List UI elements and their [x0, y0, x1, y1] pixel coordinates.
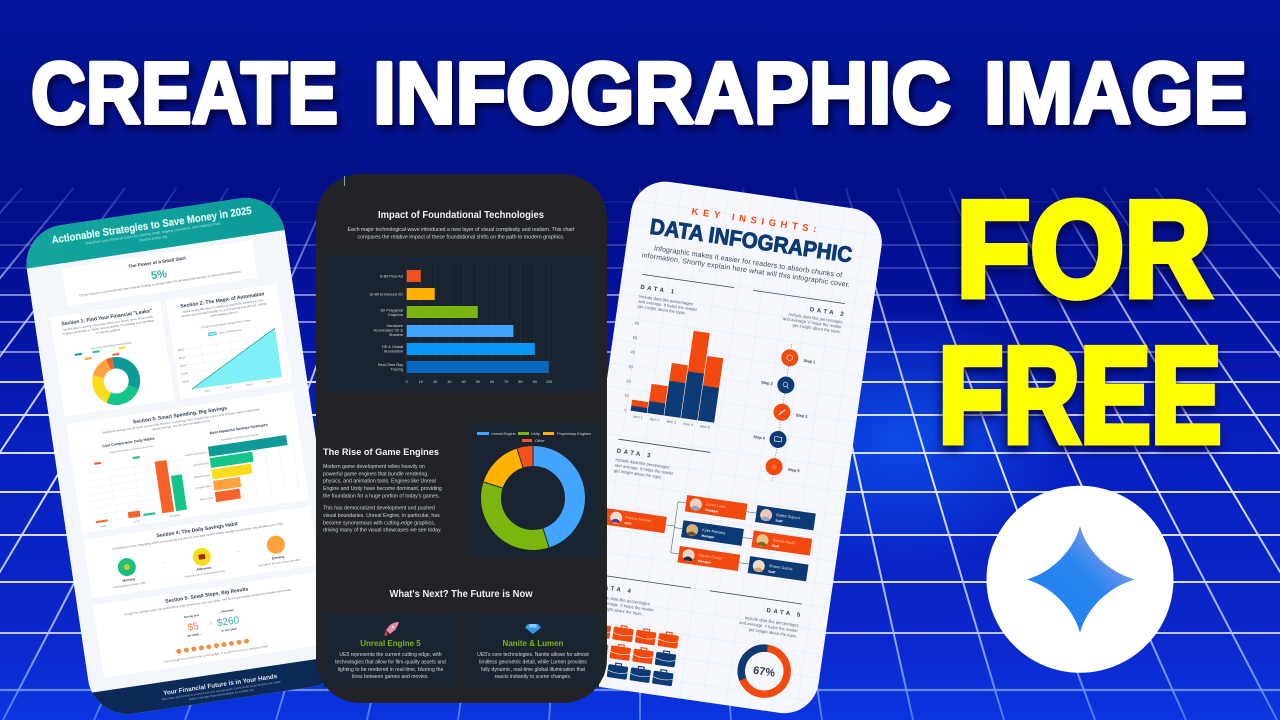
horizontal bar chart: Shaders — [389, 333, 403, 337]
data 2: steps: Step 3 — [796, 412, 809, 419]
rules — [589, 273, 845, 604]
headline: for free — [938, 173, 1222, 471]
data 3: org chart: Bailey Dupont — [776, 513, 801, 520]
card: nanite and lumen: reacts instantly to scene changes. — [495, 674, 571, 680]
panel: section 5 small steps — [93, 572, 330, 678]
data 3: org chart: Kylie Petrakis — [702, 528, 725, 535]
data 1: stacked bar chart: get insight about the topic. — [637, 304, 686, 315]
headline: for free: FOR — [956, 173, 1212, 325]
card: unreal engine 5: technologies that allow for film-quality assets and — [335, 660, 446, 666]
panel: power of a small start: The Power of a Small Start — [128, 255, 187, 269]
panel: section 2 area chart: $5000 — [179, 356, 186, 360]
panel: section 2 area chart: Make saving effortless by setting up automatic transfers to your — [183, 298, 264, 314]
horizontal bar chart — [324, 255, 598, 392]
data 1: stacked bar chart: Item 2 — [649, 417, 660, 422]
data 5: 67% donut: DATA 5 — [766, 608, 801, 619]
data 3: org chart: Samira Hadid — [772, 538, 796, 545]
panel: section 4 daily habit: → — [162, 559, 167, 566]
panel: savings infographic card — [26, 198, 324, 714]
text block: rise of game engines: The Rise of Game Engines — [323, 447, 439, 458]
panel: section 3 bar charts: Make Coffee — [200, 496, 214, 501]
panel: section 4 daily habit: Cook dinner at home, review spending — [258, 558, 301, 568]
panel: section 3 bar charts: Compare Plans — [195, 484, 213, 490]
card heading: KEY INSIGHTS: — [691, 206, 817, 235]
data 1: stacked bar chart: DATA 1 — [640, 285, 675, 296]
data 3: org chart: CEO — [624, 521, 632, 526]
data 4: briefcase pictogram — [603, 585, 679, 686]
panel: section 1 donut: The first step to saving is knowing where your money goes. Many small, — [62, 314, 154, 332]
card: unreal engine 5: UE5 represents the current cutting edge, with — [339, 652, 442, 658]
text block: rise of game engines — [323, 447, 442, 534]
text block: rise of game engines: powerful game engines that bundle rendering, — [323, 471, 429, 477]
panel: section 3 bar charts: annual savings, and the best strategies to use. — [152, 419, 211, 431]
panel: section 4 daily habit: Afternoon — [196, 566, 212, 572]
card header — [21, 192, 285, 269]
data 3: org chart: and average. It helps the reader — [614, 462, 674, 476]
text block: rise of game engines: driving many of the visual showcases we see today. — [323, 528, 442, 534]
horizontal bar chart: Hardware — [387, 324, 403, 328]
title: Create Infographic Image: IMAGE — [984, 45, 1247, 142]
panel: section 2 area chart: $3000 — [181, 372, 189, 376]
card: nanite and lumen — [466, 613, 599, 687]
panel: section 4 daily habit: Pack breakfast & make coffee — [113, 581, 147, 589]
horizontal bar chart: 80 — [518, 380, 523, 384]
donut chart: game engines: Proprietary Engines — [557, 431, 591, 436]
donut chart: game engines: Other — [535, 438, 545, 443]
panel: section 5 small steps: per week... — [187, 632, 202, 638]
data 1: stacked bar chart: Item 4 — [683, 422, 693, 427]
card footer — [92, 659, 324, 714]
data 3: org chart: Staff — [775, 518, 784, 524]
panel: section 3 bar charts: Cancel Subscriptions — [184, 451, 208, 457]
card header: choices every day. — [139, 234, 168, 243]
donut chart: game engines — [467, 423, 599, 557]
panel: section 1 donut: frequent purchases or "leaks" add up quickly. Try tracking your spending — [62, 318, 154, 336]
data 2: steps: Step 5 — [788, 467, 801, 473]
panel: section 3 bar charts — [66, 391, 309, 533]
panel: section 4 daily habit: Pack your lunch, avoid impulse buys — [185, 570, 226, 579]
data 1: stacked bar chart: 60 — [634, 320, 640, 326]
panel: section 3 bar charts: Projected Savings on Common Expenses — [109, 445, 154, 454]
card heading: Infographic makes it easier for readers to absorb chunks of — [653, 245, 843, 279]
panel: section 4 daily habit: → — [236, 548, 242, 555]
card heading: DATA INFOGRAPHIC — [648, 214, 854, 268]
heading: foundational technologies — [348, 209, 575, 240]
card footer: Your Financial Future is in Your Hands — [163, 673, 278, 697]
card footer: builds a stronger financial foundation for a better you. — [189, 688, 255, 701]
panel: section 3 bar charts: Meal Planning — [193, 462, 209, 467]
data 1: stacked bar chart: 50 — [632, 335, 638, 340]
card: unreal engine 5: Unreal Engine 5 — [360, 639, 421, 648]
data 4: briefcase pictogram: and average. It helps the reader — [595, 599, 655, 613]
data 5: 67% donut — [738, 608, 800, 698]
panel: section 2 area chart: $2000 — [182, 380, 190, 384]
data 3: org chart: Harper Russo — [698, 553, 722, 561]
panel: power of a small start: 5% — [150, 268, 168, 282]
card: unreal engine 5 — [324, 613, 457, 687]
card heading: information. Shortly explain here what will this infographic cover. — [641, 252, 850, 289]
data 2: steps: DATA 2 — [809, 307, 845, 318]
data 1: stacked bar chart: 40 — [630, 349, 636, 355]
data 2: steps: Step 4 — [753, 434, 766, 441]
data 2: steps: get insight about the topic. — [792, 322, 841, 334]
heading: foundational technologies: Each major technological wave introduced a new layer of visual complexity and realism. This chart — [348, 227, 575, 233]
horizontal bar chart: 16-Bit Enhanced 2D — [369, 292, 403, 296]
panel: section 1 donut: Section 1: Find Your Financial "Leaks" — [61, 308, 153, 328]
data 3: org chart: Manager — [698, 559, 712, 565]
panel: section 3 bar charts: Most Impactful Savings Strategies — [209, 423, 268, 435]
data 3: org chart: Aaron Loeb — [706, 502, 726, 509]
heading: foundational technologies: Impact of Foundational Technologies — [378, 209, 544, 221]
panel: section 2 area chart: Section 2: The Magic of Automation — [180, 291, 265, 310]
data 1: stacked bar chart: 30 — [628, 364, 634, 370]
data 4: briefcase pictogram: Include data like percentages — [595, 594, 650, 606]
panel: section 5 small steps: That's enough for a weekend trip, a new gadget, or a solid boost to your emergency fund! — [163, 644, 269, 664]
card heading — [642, 208, 852, 287]
horizontal bar chart: Graphics — [388, 313, 403, 317]
text block: rise of game engines: physics, and animation tools. Engines like Unreal — [323, 479, 436, 485]
data 1: stacked bar chart: Item 5 — [700, 424, 710, 430]
data 3: org chart: DATA 3 — [616, 449, 651, 459]
panel: section 5 small steps: ...becomes — [219, 608, 234, 614]
panel: section 5 small steps: Section 5: Small Steps, Big Results — [165, 586, 249, 605]
icon: gem — [525, 624, 541, 634]
card: unreal engine 5: lighting to be rendered in real-time, blurring the — [338, 667, 443, 673]
data 3: org chart: Manager — [705, 508, 719, 514]
horizontal bar chart: 8-Bit Pixel Art — [380, 274, 404, 278]
data 1: stacked bar chart: Item 1 — [633, 415, 643, 420]
horizontal bar chart: 30 — [447, 380, 452, 384]
horizontal bar chart: 70 — [504, 380, 508, 384]
panel: section 5 small steps: It might not feel like much, but small efforts build momentum over your goals. See how a tiny weekly saving accumulates each week. — [124, 587, 292, 616]
horizontal bar chart: Illumination — [384, 350, 403, 354]
panel: section 1 donut — [50, 301, 175, 417]
panel: section 5 small steps: Saving just — [184, 613, 199, 619]
panel: section 2 area chart: Year 3 — [246, 383, 254, 387]
donut chart: game engines: Unreal Engine — [491, 431, 516, 436]
horizontal bar chart: HD & Global — [382, 345, 403, 349]
horizontal bar chart: 3D Polygonal — [380, 308, 403, 312]
horizontal bar chart: 60 — [490, 380, 494, 384]
icon: gemini star badge — [986, 486, 1174, 673]
card: nanite and lumen: fully dynamic, real-time global illumination that — [481, 667, 586, 673]
panel: data infographic card — [599, 182, 882, 714]
title: Create Infographic Image: INFOGRAPHIC — [373, 45, 951, 142]
panel: power of a small start: Of your income is a powerful first step towards building a savings habit. It's not about the amount, it's about the consistency. — [79, 269, 242, 298]
data 1: stacked bar chart: Include data like percentages — [639, 294, 693, 306]
panel: section 1 donut: Top Areas of Monthly Overspending — [90, 340, 132, 350]
panel: section 3 bar charts: Cost Comparison: Daily Habits — [102, 437, 155, 448]
horizontal bar chart: 90 — [533, 380, 537, 384]
data 3: org chart: get insight about the topic. — [614, 468, 663, 480]
data 1: stacked bar chart — [624, 284, 724, 428]
horizontal bar chart: 100 — [546, 380, 552, 384]
data 3: org chart: Staff — [768, 569, 776, 574]
panel: section 2 area chart: $4000 — [180, 364, 188, 368]
horizontal bar chart: 10 — [419, 380, 423, 384]
data 5: 67% donut: get insight about the topic. — [748, 627, 798, 639]
data 2: steps — [753, 307, 844, 481]
data 4: briefcase pictogram: get insight about the topic. — [594, 604, 643, 616]
card: nanite and lumen: limitless geometric detail, while Lumen provides — [479, 660, 587, 666]
card header: Actionable Strategies to Save Money in 2025 — [51, 205, 253, 246]
panel: section 2 area chart: Value of $100 Monthly — [218, 328, 243, 335]
data 3: org chart: Manager — [701, 534, 716, 539]
panel: section 4 daily habit — [83, 506, 319, 599]
data 2: steps: and average. It helps the reader — [783, 316, 843, 329]
panel: section 3 bar charts: Reduce Energy — [194, 474, 211, 479]
card: nanite and lumen: UE5's core technologies. Nanite allows for almost — [477, 652, 589, 658]
panel: section 3 bar charts: Section 3: Smart Spending, Big Savings — [133, 406, 228, 426]
text block: rise of game engines: the foundation for a huge portion of today's games. — [323, 493, 440, 499]
heading: what's next: What's Next? The Future is Now — [390, 588, 533, 600]
data 5: 67% donut: 67% — [752, 665, 776, 680]
data 3: org chart — [592, 447, 821, 581]
panel: section 4 daily habit: Evening — [272, 555, 285, 560]
data 3: org chart: Include data like percentages — [615, 457, 670, 470]
panel: section 2 area chart: Year 2 — [225, 386, 233, 390]
horizontal bar chart: 20 — [433, 380, 437, 384]
horizontal bar chart: Accelerated 3D & — [373, 328, 403, 332]
text block: rise of game engines: This has democratized development and pushed — [323, 506, 435, 512]
card header: Transform your financial future by starting small, staying consistent, and making smart — [85, 221, 221, 246]
panel: section 2 area chart: even thinking about it. — [210, 310, 239, 318]
panel: section 2 area chart: Year 1 — [204, 389, 212, 393]
data 3: org chart: Staff — [772, 544, 780, 549]
panel: section 3 bar charts: Coffee — [100, 524, 108, 529]
title: Create Infographic Image — [31, 45, 1247, 142]
icon: rocket — [384, 622, 399, 636]
text block: rise of game engines: Modern game development relies heavily on — [323, 464, 425, 470]
panel: section 2 area chart: Year 4 — [265, 380, 273, 384]
data 2: steps: ☆ — [770, 463, 778, 471]
data 1: stacked bar chart: Item 3 — [666, 419, 677, 425]
card: unreal engine 5: lines between games and movies. — [352, 674, 429, 680]
panel: section 4 daily habit: Morning — [122, 577, 135, 583]
data 4: briefcase pictogram: DATA 4 — [597, 584, 632, 595]
data 2: steps: Include data like percentages — [788, 312, 843, 324]
data 3: org chart: Shawn Garcia — [769, 564, 794, 571]
panel: section 4 daily habit: Section 4: The Daily Savings Habit — [156, 521, 238, 539]
panel: section 2 area chart: $6000 — [178, 348, 185, 352]
data 5: 67% donut: and average. It helps the reader — [739, 620, 799, 633]
panel: dark graphics card — [316, 174, 607, 703]
horizontal bar chart: 0 — [406, 380, 408, 384]
data 1: stacked bar chart: and average. It helps the reader — [638, 299, 698, 312]
panel: section 3 bar charts: Streaming — [169, 514, 181, 518]
panel: section 2 area chart: savings account each payday so you're paying yourself first, without — [181, 301, 267, 318]
data 1: stacked bar chart: 20 — [626, 378, 632, 384]
horizontal bar chart: 50 — [476, 380, 480, 384]
data 1: stacked bar chart: 0 — [624, 407, 628, 413]
horizontal bar chart: Tracing — [390, 368, 403, 372]
panel: power of a small start — [62, 240, 257, 306]
data 3: org chart: Francis Manuel — [625, 515, 651, 523]
panel: section 2 area chart: Growth of Automated Savings Over 5 Years — [201, 318, 252, 329]
text block: rise of game engines: Engine and Unity have become dominant, providing — [323, 486, 442, 492]
panel: section 2 area chart — [166, 284, 291, 399]
horizontal bar chart: 40 — [461, 380, 466, 384]
text block: rise of game engines: visual boundaries. Unreal Engine, in particular, has — [323, 513, 440, 519]
panel: section 4 daily habit: Consistency is key. Integrating small money-saving actions into your daily routine makes savings an automatic and effortless part of life. — [112, 521, 284, 551]
data 2: steps: Step 1 — [803, 358, 816, 365]
panel: section 1 donut: to see the patterns. — [96, 327, 121, 335]
cursor mark — [343, 176, 346, 186]
panel: section 3 bar charts: Significant savings can be found in your daily choices. Comparing costs reveals how a few small changes lead to substantial — [102, 407, 260, 435]
card footer: Start today and commit to yourself and your savings goals. Every small, smart decision you make — [161, 680, 281, 701]
data 2: steps: Step 2 — [761, 379, 774, 386]
data 5: 67% donut: Include data like percentages — [744, 615, 799, 628]
heading: foundational technologies: compares the relative impact of these foundational shifts on the path to modern graphics. — [358, 234, 564, 240]
data 1: stacked bar chart: 10 — [624, 393, 630, 398]
horizontal bar chart: Real-Time Ray — [378, 363, 403, 367]
panel: section 5 small steps: = — [209, 621, 214, 627]
title: Create Infographic Image: CREATE — [31, 45, 338, 142]
panel: section 5 small steps: $260 — [216, 615, 240, 629]
panel: section 5 small steps: $5 — [187, 621, 200, 634]
donut chart: game engines: Unity — [531, 431, 540, 436]
text block: rise of game engines: become synonymous with cutting-edge graphics, — [323, 520, 435, 526]
panel: section 3 bar charts: Estimated Potential Annual Savings — [221, 433, 260, 442]
panel: section 5 small steps: in one year! — [221, 626, 237, 633]
panel: section 3 bar charts: Lunch — [133, 520, 140, 524]
card: nanite and lumen: Nanite & Lumen — [503, 639, 564, 648]
